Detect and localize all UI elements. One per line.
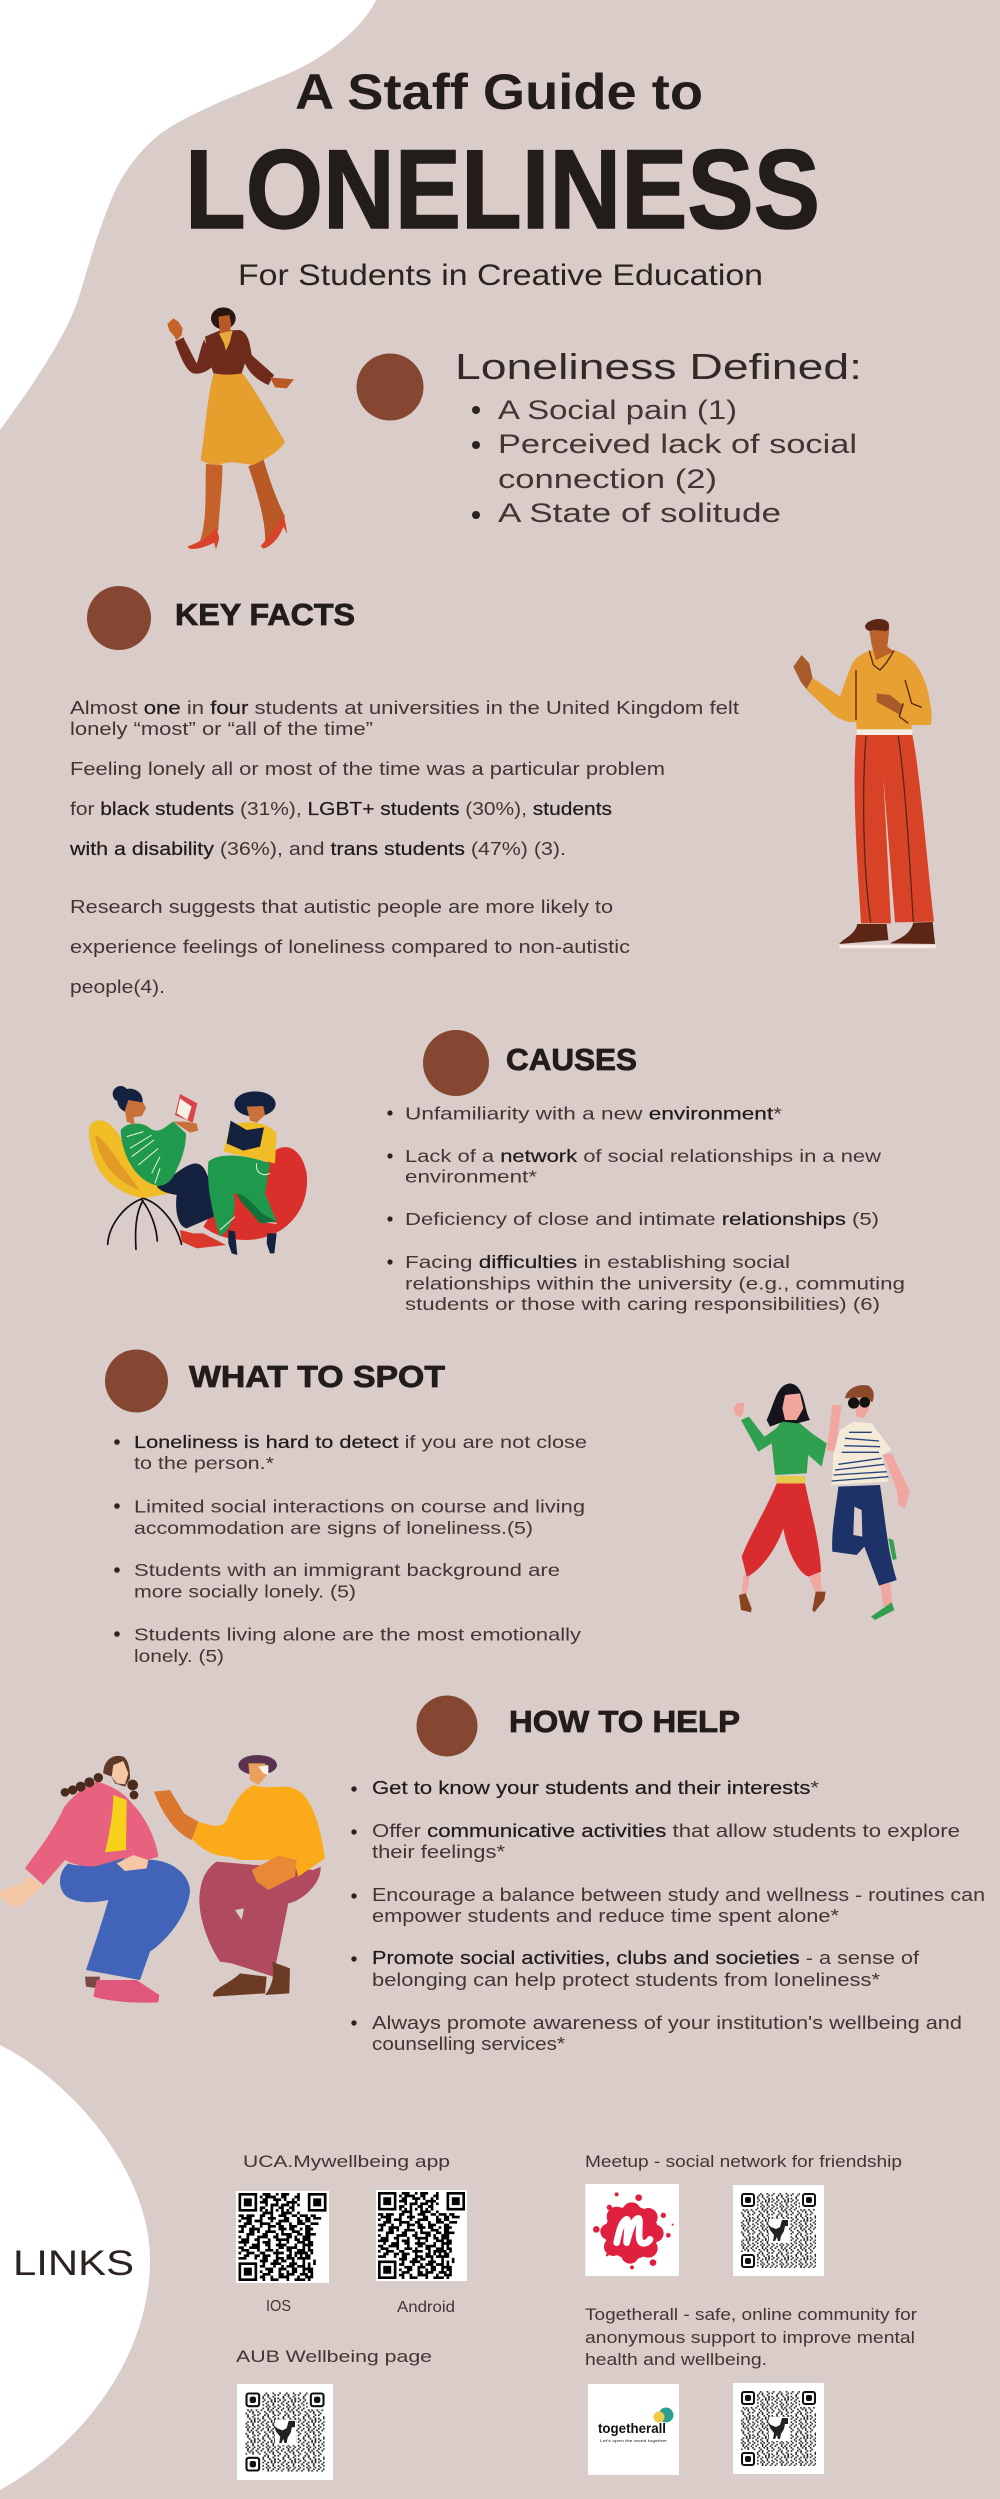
how to help list: counselling services* [372,2034,565,2054]
title: A Staff Guide to [295,64,703,120]
QR code: meetup [733,2185,824,2276]
what to spot list: Students living alone are the most emotionally [134,1625,581,1645]
heading: causes: CAUSES [506,1042,637,1077]
key facts text: Research suggests that autistic people are more likely to [70,897,613,917]
circle marker [423,1030,489,1096]
what to spot list: Loneliness is hard to detect if you are not close [134,1432,587,1452]
QR code: iOS [236,2191,329,2283]
logo: togetherall: togetherall [598,2420,666,2436]
causes list: Unfamiliarity with a new environment * [405,1104,782,1124]
what to spot list: Limited social interactions on course and living [134,1496,585,1516]
heading: links: LINKS [13,2244,134,2283]
logo: togetherall [588,2384,679,2475]
heading: how to help: HOW TO HELP [509,1704,740,1739]
how to help list: Always promote awareness of your institution's wellbeing and [372,2013,962,2033]
circle marker [87,586,151,650]
panel: causes [387,1030,905,1314]
label: AUB wellbeing: AUB Wellbeing page [236,2347,432,2366]
definition list: Perceived lack of social [498,429,857,459]
title: LONELINESS [185,127,820,252]
heading: key facts: KEY FACTS [175,597,355,632]
panel: what to spot [105,1350,587,1666]
key facts text: lonely “most” or “all of the time” [70,719,373,739]
key facts text: with a disability (36%), and trans students (47%) (3). [69,839,566,859]
definition list: connection (2) [498,464,717,494]
panel: how to help [351,1696,985,2054]
causes list: Lack of a network of social relationships in a new [405,1146,881,1166]
what to spot list: lonely. (5) [134,1646,224,1666]
how to help list: empower students and reduce time spent alone* [372,1906,839,1926]
key facts text: experience feelings of loneliness compared to non-autistic [70,937,630,957]
white blob bottom-left [0,2045,150,2490]
illustration: two people dancing [733,1383,910,1620]
label: Android: Android [397,2299,455,2316]
how to help list: Encourage a balance between study and wellness - routines can [372,1885,985,1905]
causes list: Facing difficulties in establishing social [405,1252,790,1272]
key facts text: Almost one in four students at universities in the United Kingdom felt [70,698,739,718]
what to spot list: more socially lonely. (5) [134,1582,356,1602]
logo: togetherall: Let's open the world together [600,2439,668,2443]
definition list: A Social pain (1) [498,395,737,425]
illustration: two people reading [89,1086,307,1255]
heading: loneliness defined: Loneliness Defined: [455,346,862,387]
causes list [387,1104,905,1314]
panel: key facts [69,586,739,997]
what to spot list [114,1432,587,1666]
illustration: two people seated talking [0,1755,325,2003]
logo: meetup [585,2184,679,2276]
circle marker [416,1696,478,1756]
definition list: A State of solitude [498,498,781,528]
what to spot list: accommodation are signs of loneliness.(5) [134,1518,533,1538]
what to spot list: to the person.* [134,1453,274,1473]
causes list: environment* [405,1166,537,1186]
how to help list: Get to know your students and their interests * [372,1778,819,1798]
circle marker [356,354,424,420]
QR code: AUB [237,2384,333,2480]
causes list: Deficiency of close and intimate relationships (5) [405,1209,879,1229]
label: UCA app: UCA.Mywellbeing app [243,2152,450,2171]
how to help list: Promote social activities, clubs and societies - a sense of [372,1948,920,1968]
text: togetherall: Togetherall - safe, online community for [585,2305,917,2324]
illustration: woman in yellow skirt [167,307,294,549]
causes list: students or those with caring responsibilities) (6) [405,1294,880,1314]
panel: loneliness defined [356,346,862,528]
white blob top-left [0,0,376,430]
how to help list [351,1778,985,2054]
key facts text [69,698,739,997]
title [185,64,820,292]
key facts text: for black students (31%), LGBT+ students (30%), students [70,799,612,819]
text: togetherall: health and wellbeing. [585,2350,767,2369]
title: For Students in Creative Education [238,259,763,292]
circle marker [105,1350,168,1412]
how to help list: Offer communicative activities that allow students to explore [372,1821,960,1841]
illustration: man in orange trousers [793,619,936,948]
text: togetherall: anonymous support to improve mental [585,2328,915,2347]
definition list [472,395,857,528]
how to help list: their feelings* [372,1842,505,1862]
panel: links [13,2152,917,2480]
QR code: Android [376,2190,467,2281]
key facts text: people(4). [70,977,165,997]
label: meetup: Meetup - social network for friendship [585,2152,902,2171]
QR code: togetherall [733,2383,824,2474]
text: togetherall [585,2305,917,2369]
what to spot list: Students with an immigrant background are [134,1560,560,1580]
label: iOS: IOS [266,2298,291,2315]
heading: what to spot: WHAT TO SPOT [189,1359,445,1394]
key facts text: Feeling lonely all or most of the time was a particular problem [70,759,665,779]
how to help list: belonging can help protect students from loneliness* [372,1970,880,1990]
causes list: relationships within the university (e.g., commuting [405,1274,905,1294]
